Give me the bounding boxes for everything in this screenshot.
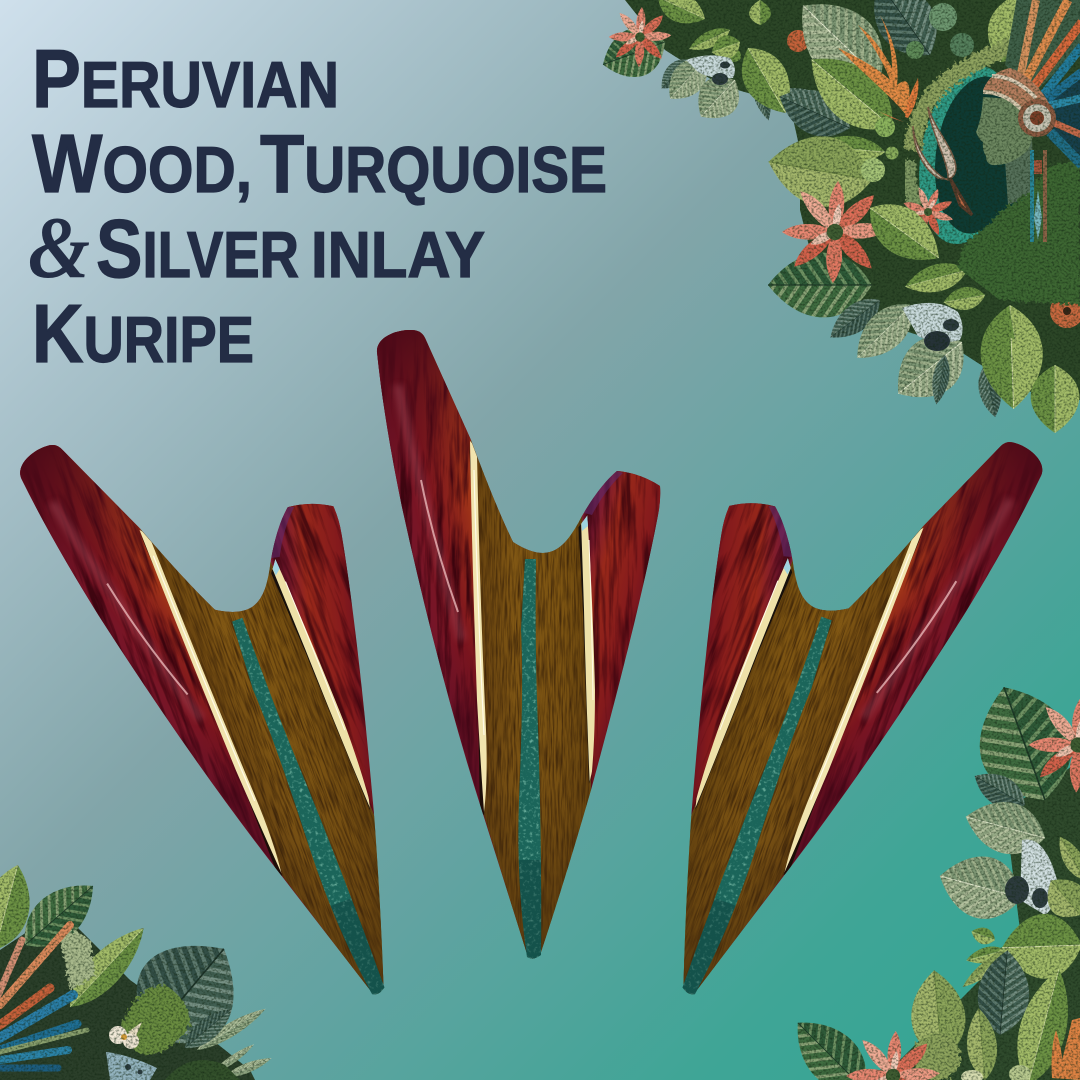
icon: moss arch xyxy=(908,46,1014,245)
icon: feathers xyxy=(0,925,87,1068)
icon: coral flower xyxy=(609,7,671,67)
foliage cluster: top right with headdress figure xyxy=(595,0,1080,433)
title: WOOD, xyxy=(32,117,252,210)
title: KURIPE xyxy=(32,287,254,380)
icon: moss bush xyxy=(120,985,190,1055)
icon: big coral flower xyxy=(782,181,888,283)
icon: portal ring xyxy=(906,58,1032,252)
kuripe: center xyxy=(360,320,665,960)
icon: headband xyxy=(983,68,1050,110)
title: & xyxy=(28,200,90,297)
kuripe: left xyxy=(0,349,502,1055)
icon: forest bush xyxy=(958,160,1080,305)
icon: pleated leaf xyxy=(780,1005,883,1080)
title: TURQUOISE xyxy=(260,117,607,210)
icon: stream xyxy=(106,1052,157,1080)
kuripe: right xyxy=(564,348,1068,1053)
icon: orange flower xyxy=(787,30,809,52)
icon: waterfall rocks xyxy=(1005,876,1048,908)
icon: ornament tassel xyxy=(950,178,972,215)
icon: bird of paradise flower xyxy=(838,15,918,122)
title: INLAY xyxy=(311,218,485,291)
icon: stream with rocks xyxy=(902,303,963,351)
icon: white flower xyxy=(109,1022,142,1049)
title xyxy=(28,32,607,380)
icon: green fruits xyxy=(861,117,898,182)
title: SILVER xyxy=(96,202,299,295)
icon: moss bush xyxy=(913,1033,961,1080)
icon: pale spiky leaves xyxy=(165,1001,273,1080)
icon: coral flower xyxy=(846,1031,940,1080)
icon: stream with rocks xyxy=(686,55,735,85)
icon: feather headdress xyxy=(1005,0,1080,185)
foliage cluster: bottom left with feathers xyxy=(0,859,273,1080)
icon: medallion and dangling beads xyxy=(1018,99,1056,242)
foliage cluster: bottom right xyxy=(780,672,1080,1080)
icon: bird of paradise xyxy=(1052,1018,1080,1080)
icon: neck xyxy=(1005,140,1035,205)
icon: hanging bone ornament xyxy=(913,107,956,180)
icon: stone head profile xyxy=(976,97,1035,165)
title: PERUVIAN xyxy=(32,32,339,125)
icon: fruits xyxy=(961,1065,1031,1080)
